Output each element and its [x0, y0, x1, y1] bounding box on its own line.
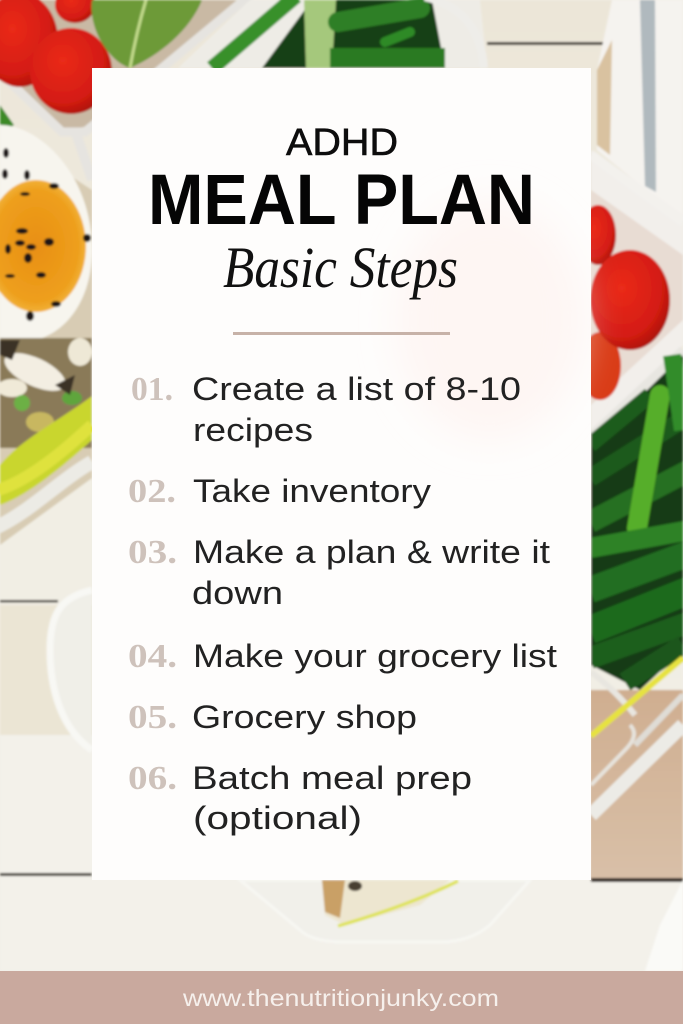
website url: www.thenutritionjunky.com: [182, 985, 499, 1011]
step 05: 05.: [128, 699, 177, 736]
list of steps: [128, 371, 557, 836]
right container with tomatoes: [579, 150, 683, 440]
step 04: 04.: [128, 638, 177, 675]
step 06: [128, 760, 472, 836]
step 05: [128, 699, 417, 736]
panel: translucent white card: [92, 68, 591, 880]
step 04: Make your grocery list: [193, 638, 557, 674]
step 01: recipes: [193, 412, 313, 448]
step 02: 02.: [128, 473, 176, 510]
divider: [233, 332, 450, 335]
step 06: (optional): [193, 800, 362, 836]
bottom container with rice: [240, 880, 530, 942]
step 01: 01.: [131, 371, 173, 408]
step 03: down: [192, 575, 283, 611]
heading: ADHD: ADHD: [286, 122, 398, 164]
heading: MEAL PLAN: MEAL PLAN: [148, 161, 535, 240]
rice and yellow pepper: [0, 338, 92, 600]
heading: Basic Steps: Basic Steps: [223, 235, 458, 300]
lower left container edge: [50, 590, 92, 750]
step 06: 06.: [128, 760, 177, 797]
step 02: Take inventory: [193, 473, 431, 509]
lower right container and yellow stalk: [591, 658, 683, 815]
step 03: 03.: [128, 534, 177, 571]
footer band: [0, 971, 683, 1024]
right green beans: [590, 355, 683, 690]
step 02: [128, 473, 431, 510]
title: [148, 122, 535, 300]
step 03: Make a plan & write it: [193, 534, 550, 570]
boiled egg: [0, 125, 92, 560]
step 01: [131, 371, 521, 448]
striped cloth: [597, 0, 683, 971]
top centre green beans: [178, 0, 487, 68]
step 05: Grocery shop: [192, 699, 417, 735]
step 01: Create a list of 8-10: [192, 371, 521, 407]
step 03: [128, 534, 550, 611]
step 06: Batch meal prep: [192, 760, 472, 796]
top left container with tomatoes and leaf: [0, 0, 250, 180]
